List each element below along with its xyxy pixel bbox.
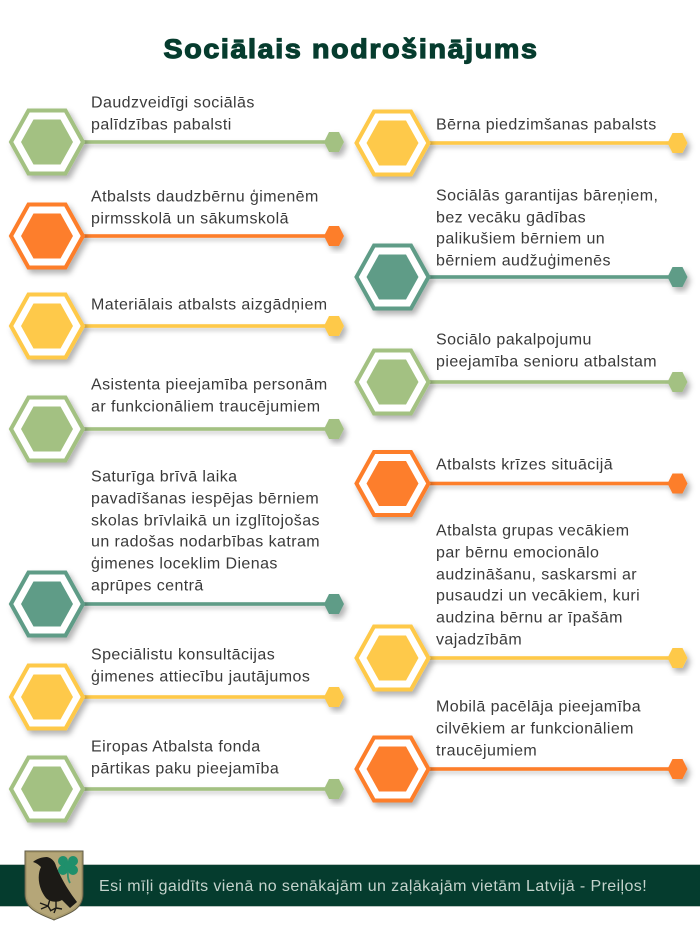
label: Asistenta pieejamība personām: [91, 376, 328, 394]
label: vajadzībām: [436, 632, 522, 648]
connector line with hexagons: [356, 738, 688, 800]
label: traucējumiem: [436, 742, 537, 760]
label: palīdzības pabalsti: [91, 116, 232, 134]
connector line with hexagons: [356, 626, 688, 690]
connector line with hexagons: [11, 294, 344, 358]
footer band: [0, 864, 700, 907]
label: pusaudzi un vecākiem, kuri: [436, 588, 640, 604]
label: pavadīšanas iespējas bērniem: [91, 490, 319, 508]
label: un radošas nodarbības katram: [91, 534, 320, 550]
item: Atbalsta grupas vecākiem: [356, 522, 688, 690]
connector line with hexagons: [11, 572, 344, 636]
label: cilvēkiem ar funkcionāliem: [436, 720, 634, 738]
label: par bērnu emocionālo: [436, 544, 599, 562]
item: Atbalsts krīzes situācijā: [356, 452, 688, 515]
footer slogan: Esi mīļi gaidīts vienā no senākajām un zaļākajām vietām Latvijā - Preiļos!: [99, 878, 647, 895]
label: Atbalsta grupas vecākiem: [436, 522, 630, 540]
item: Asistenta pieejamība: [11, 376, 344, 460]
connector line with hexagons: [11, 110, 344, 174]
label: Materiālais atbalsts aizgādņiem: [91, 296, 328, 314]
label: Daudzveidīgi sociālās: [91, 94, 255, 112]
label: Atbalsts daudzbērnu ģimenēm: [91, 188, 319, 206]
connector line with hexagons: [356, 452, 688, 515]
label: ar funkcionāliem traucējumiem: [91, 398, 320, 416]
title: Sociālais nodrošinājums: [163, 34, 539, 64]
item: Saturīga brīvā laika pavadīšana: [11, 468, 344, 636]
label: Eiropas Atbalsta fonda: [91, 738, 261, 756]
label: Atbalsts krīzes situācijā: [436, 456, 613, 474]
label: Sociālās garantijas bāreņiem,: [436, 188, 658, 204]
connector line with hexagons: [356, 350, 688, 414]
label: Saturīga brīvā laika: [91, 468, 237, 486]
item: Atbalsts daudzbērnu ģimenēm: [11, 188, 344, 268]
item: Bērna piedzimšanas pabalsts: [356, 112, 688, 174]
clover: [68, 866, 70, 883]
connector line with hexagons: [11, 204, 344, 268]
label: pieejamība senioru atbalstam: [436, 354, 657, 370]
label: skolas brīvlaikā un izglītojošas: [91, 512, 320, 530]
label: Mobilā pacēlāja pieejamība: [436, 698, 641, 716]
label: Sociālo pakalpojumu: [436, 332, 592, 348]
label: bez vecāku gādības: [436, 210, 586, 226]
label: ģimenes loceklim Dienas: [91, 554, 278, 572]
icon: coat of arms: [25, 851, 83, 920]
item: Speciālistu konsultācijas: [11, 646, 344, 728]
label: audzināšanu, saskarsmi ar: [436, 566, 637, 584]
label: pirmsskolā un sākumskolā: [91, 210, 289, 228]
label: palikušiem bērniem un: [436, 230, 605, 248]
raven: [33, 857, 77, 908]
item: Sociālo pakalpojumu pieejamība: [356, 332, 688, 414]
label: audzina bērnu ar īpašām: [436, 610, 623, 626]
label: ģimenes attiecību jautājumos: [91, 668, 310, 686]
connector line with hexagons: [356, 112, 688, 174]
item: Daudzveidīgi sociālās palīdzības pabalsti: [11, 94, 344, 174]
connector line with hexagons: [11, 758, 344, 820]
connector line with hexagons: [356, 246, 688, 308]
label: Speciālistu konsultācijas: [91, 646, 275, 664]
item: Materiālais atbalsts aizgādņiem: [11, 294, 344, 358]
label: pārtikas paku pieejamība: [91, 760, 279, 778]
label: aprūpes centrā: [91, 578, 204, 594]
item: Sociālās garantijas bāreņiem: [356, 188, 688, 308]
item: Mobilā pacēlāja pieejamība: [356, 698, 688, 800]
label: Bērna piedzimšanas pabalsts: [436, 116, 657, 134]
label: bērniem audžuģimenēs: [436, 252, 611, 270]
item: Eiropas Atbalsta fonda: [11, 738, 344, 820]
connector line with hexagons: [11, 398, 344, 460]
connector line with hexagons: [11, 666, 344, 728]
